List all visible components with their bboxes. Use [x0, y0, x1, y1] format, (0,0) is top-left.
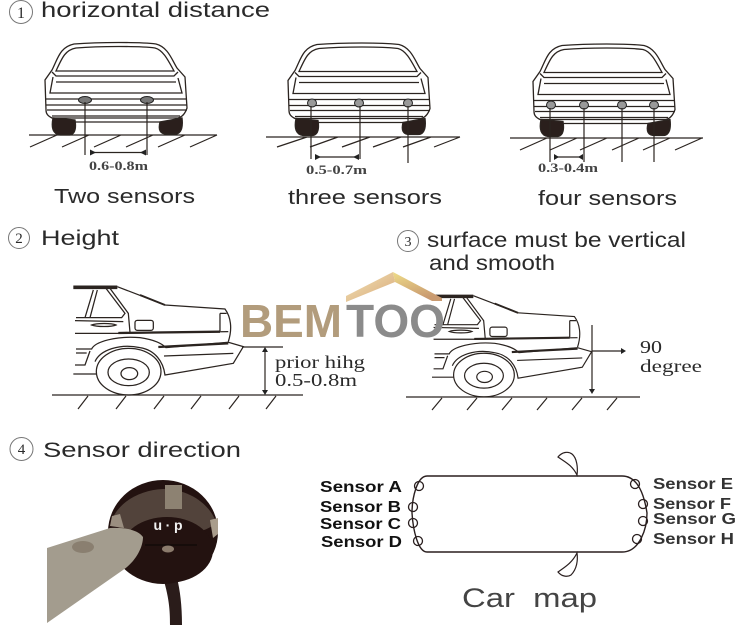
car map diagram — [320, 452, 736, 576]
watermark: BEMTOO logo: TOO — [346, 295, 445, 347]
heading: sensor direction: Sensor direction — [43, 439, 241, 462]
heading: horizontal distance: 1 — [17, 5, 25, 22]
caption: two sensors: Two sensors — [54, 186, 195, 208]
heading: surface must be vertical and smooth — [398, 229, 686, 275]
diagram: three sensors car — [266, 43, 460, 177]
heading: sensor direction: 4 — [18, 442, 26, 458]
diagram: side view car with height: prior hihg — [275, 352, 365, 372]
diagram: side view car with 90 degree — [406, 296, 702, 410]
car map diagram: Sensor D — [321, 534, 402, 551]
car map diagram: Sensor A — [320, 479, 403, 496]
diagram: two sensors car: 0.6-0.8m — [89, 159, 149, 173]
heading: surface must be vertical and smooth: 3 — [404, 235, 412, 250]
photo: finger pointing at sensor: u·p — [154, 517, 182, 533]
diagram: side view car with 90 degree: degree — [640, 356, 702, 376]
heading: surface must be vertical and smooth: and smooth — [429, 252, 555, 275]
car map diagram: Sensor C — [320, 516, 402, 533]
diagram: two sensors car — [29, 42, 217, 173]
diagram: three sensors car: 0.5-0.7m — [306, 163, 368, 177]
caption: car map: Car map — [462, 583, 597, 613]
heading: height: 2 — [15, 231, 23, 247]
heading: surface must be vertical and smooth: surface must be vertical — [427, 229, 686, 252]
car map diagram: Sensor H — [653, 531, 734, 548]
diagram: four sensors car: 0.3-0.4m — [538, 161, 599, 175]
car map diagram: Sensor B — [320, 499, 401, 516]
caption: three sensors: three sensors — [288, 187, 442, 209]
car map diagram: Sensor F — [653, 496, 731, 513]
photo: finger pointing at sensor — [47, 480, 218, 625]
car map diagram: Sensor E — [653, 476, 733, 493]
heading: height: Height — [41, 227, 119, 250]
watermark: BEMTOO logo: BEM — [240, 295, 342, 347]
diagram: side view car with height: 0.5-0.8m — [275, 370, 357, 390]
diagram: side view car with 90 degree: 90 — [640, 337, 662, 357]
car map diagram: Sensor G — [653, 511, 736, 528]
heading: height — [8, 227, 119, 250]
diagram: four sensors car — [510, 44, 703, 175]
diagram: side view car with height — [52, 287, 365, 409]
heading: sensor direction — [10, 438, 241, 462]
watermark: BEMTOO logo — [240, 272, 445, 347]
heading: horizontal distance — [10, 0, 270, 24]
caption: four sensors: four sensors — [538, 188, 677, 210]
